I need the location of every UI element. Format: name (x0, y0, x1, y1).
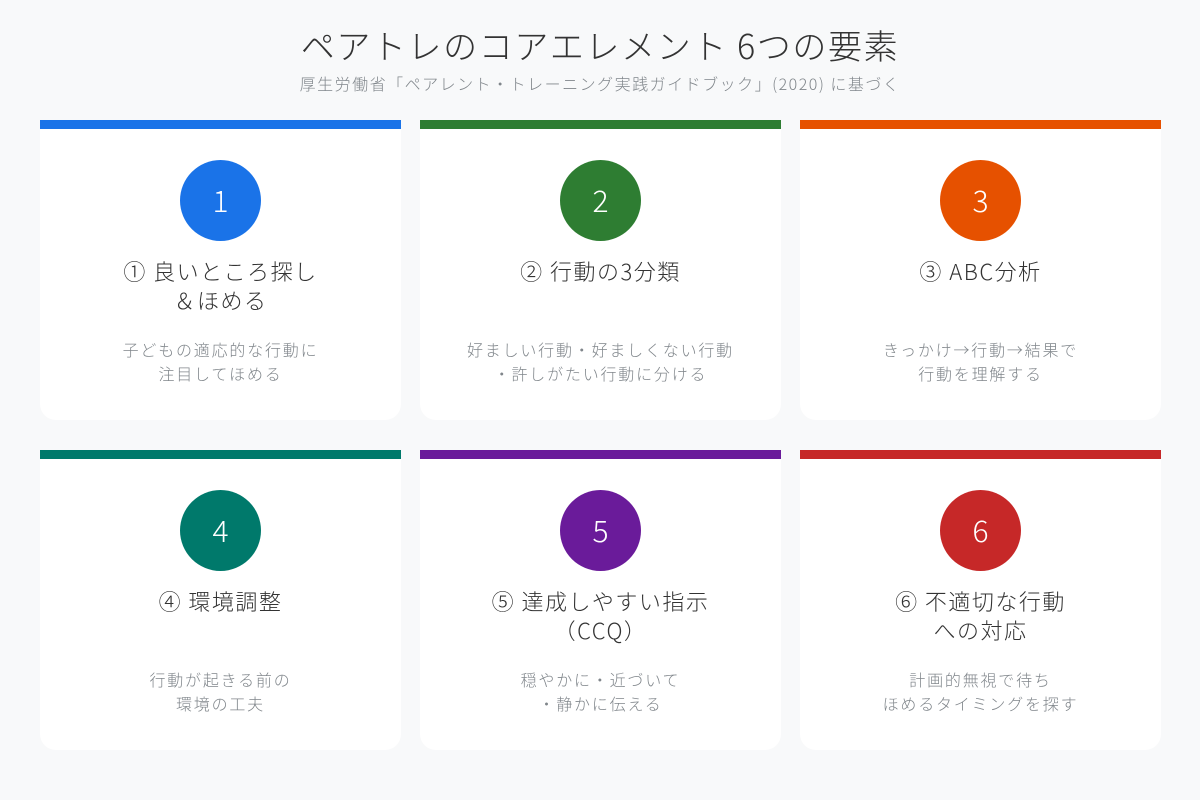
heading 3: ③ ABC分析 (919, 255, 1042, 287)
text 2: 好ましい行動・好ましくない行動 (467, 337, 734, 361)
panel: 4 (40, 450, 401, 750)
text 5: ・静かに伝える (538, 691, 663, 715)
heading 4: ④ 環境調整 (159, 585, 282, 617)
icon: number 4: 4 (212, 507, 229, 551)
heading 1: ＆ほめる (173, 284, 268, 316)
text 1: 子どもの適応的な行動に (123, 337, 318, 361)
heading 6: への対応 (933, 614, 1028, 646)
text 2 (467, 337, 734, 385)
icon: number 5: 5 (592, 507, 609, 551)
icon: number 4 (180, 490, 261, 571)
icon: number 3 (940, 160, 1021, 241)
panel: 3 (800, 120, 1161, 420)
heading 1: ① 良いところ探し (123, 255, 318, 287)
text 5 (521, 667, 680, 715)
icon: number 5 (560, 490, 641, 571)
icon: number 2: 2 (592, 177, 609, 221)
icon: number 3: 3 (972, 177, 989, 221)
text 1 (123, 337, 318, 385)
text 3: 行動を理解する (918, 361, 1043, 385)
text 4 (149, 667, 292, 715)
text 1: 注目してほめる (158, 361, 283, 385)
heading 5 (492, 585, 709, 646)
text 4: 環境の工夫 (176, 691, 265, 715)
heading 5: （CCQ） (554, 614, 647, 646)
text 6: 計画的無視で待ち (909, 667, 1052, 691)
panel: 2 (420, 120, 781, 420)
text 3: きっかけ→行動→結果で (883, 337, 1078, 361)
heading 1 (123, 255, 318, 316)
icon: number 2 (560, 160, 641, 241)
title: ペアトレのコアエレメント 6つの要素 (301, 20, 899, 69)
panel: 5 (420, 450, 781, 750)
icon: number 1 (180, 160, 261, 241)
panel: 1 (40, 120, 401, 420)
icon: number 6 (940, 490, 1021, 571)
text 3 (883, 337, 1078, 385)
panel: 6 (800, 450, 1161, 750)
text 6 (883, 667, 1078, 715)
text 5: 穏やかに・近づいて (521, 667, 680, 691)
heading 5: ⑤ 達成しやすい指示 (492, 585, 709, 617)
heading 2: ② 行動の3分類 (520, 255, 681, 287)
text 2: ・許しがたい行動に分ける (494, 361, 707, 385)
heading 6: ⑥ 不適切な行動 (895, 585, 1066, 617)
icon: number 1: 1 (212, 177, 229, 221)
heading 6 (895, 585, 1066, 646)
text 4: 行動が起きる前の (149, 667, 292, 691)
icon: number 6: 6 (972, 507, 989, 551)
text 6: ほめるタイミングを探す (883, 691, 1078, 715)
subtitle: 厚生労働省「ペアレント・トレーニング実践ガイドブック」(2020) に基づく (300, 71, 900, 95)
